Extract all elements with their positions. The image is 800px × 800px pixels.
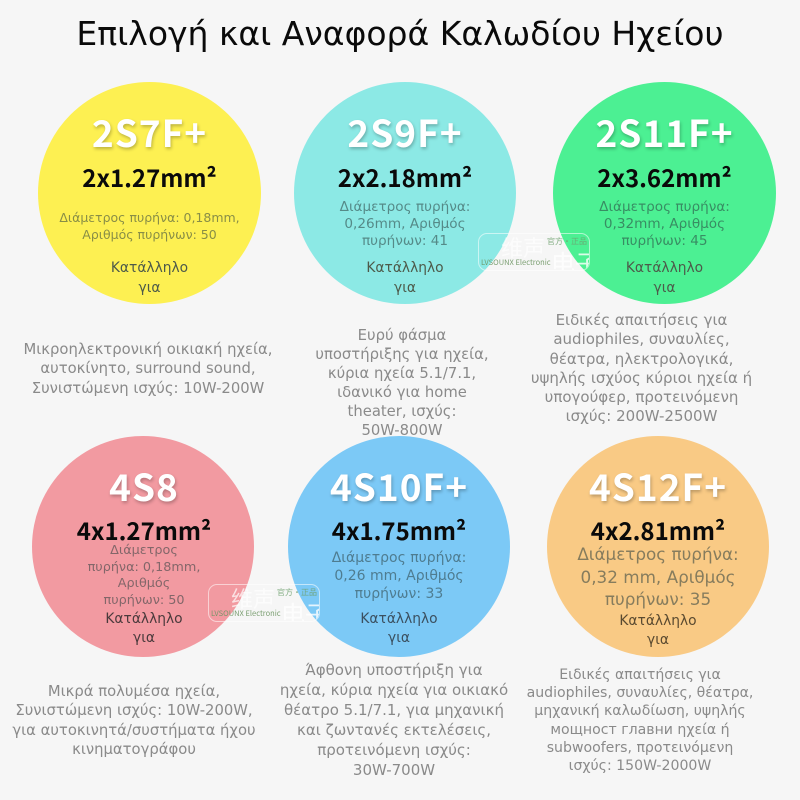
core details: 0,32mm, Αριθμός bbox=[604, 216, 725, 232]
description: 2S11F+: Ειδικές απαιτήσεις για bbox=[556, 311, 727, 329]
model name: 2S11F+ bbox=[595, 104, 734, 158]
watermark bbox=[208, 584, 320, 622]
panel: 2S9F+ bbox=[294, 82, 516, 304]
core details: πυρήνων: 33 bbox=[355, 586, 443, 602]
title: Επιλογή και Αναφορά Καλωδίου Ηχείου bbox=[76, 14, 724, 53]
core details bbox=[577, 544, 739, 609]
description: 4S12F+: Ειδικές απαιτήσεις για bbox=[559, 667, 721, 683]
description: 4S8 bbox=[12, 683, 256, 758]
description: 4S8: για αυτοκινητά/συστήματα ήχου bbox=[12, 722, 256, 739]
cable size: 2x2.18mm² bbox=[338, 159, 472, 194]
cable size: 2x1.27mm² bbox=[82, 159, 217, 194]
description: 4S12F+: ισχύς: 150W-2000W bbox=[569, 758, 711, 774]
suitable for bbox=[360, 611, 438, 646]
description: 4S12F+: мощност главни ηχεία ή bbox=[550, 722, 730, 738]
description: 2S7F+ bbox=[24, 341, 272, 397]
suitable for: Κατάλληλο bbox=[626, 260, 703, 276]
description: 2S11F+: υπογούφερ, προτεινόμενη bbox=[545, 388, 738, 406]
suitable for: για bbox=[139, 280, 160, 296]
core details: πυρήνα: 0,18mm, bbox=[88, 560, 200, 574]
description: 2S7F+: αυτοκίνητο, surround sound, bbox=[40, 360, 256, 377]
core details: Διάμετρος πυρήνα: 0,18mm, bbox=[59, 210, 240, 225]
cable size: 4x2.81mm² bbox=[591, 512, 725, 547]
panel: 2S11F+ bbox=[553, 82, 776, 304]
description: 4S10F+: Άφθονη υποστήριξη για bbox=[305, 661, 483, 679]
description: 4S10F+: προτεινόμενη ισχύς: bbox=[317, 741, 471, 759]
watermark: LVSOUNX Electronic bbox=[211, 608, 281, 619]
description: 2S9F+: theater, ισχύς: bbox=[348, 403, 456, 420]
description: 2S9F+: κύρια ηχεία 5.1/7.1, bbox=[328, 365, 476, 382]
core details: πυρήνων: 45 bbox=[621, 233, 708, 249]
cable size: 2x3.62mm² bbox=[597, 159, 732, 194]
core details bbox=[59, 210, 240, 242]
core details: Αριθμός bbox=[118, 576, 170, 591]
core details: Διάμετρος πυρήνα: bbox=[340, 199, 470, 215]
core details: Διάμετρος πυρήνα: bbox=[599, 199, 730, 215]
core details bbox=[332, 550, 466, 602]
watermark: LVSOUNX Electronic bbox=[481, 257, 551, 268]
core details: 0,32 mm, Αριθμός bbox=[581, 566, 735, 586]
suitable for bbox=[105, 611, 183, 646]
suitable for: για bbox=[388, 630, 410, 646]
description: 2S9F+: ιδανικό για home bbox=[337, 384, 467, 401]
suitable for: για bbox=[133, 630, 155, 646]
description: 4S12F+: subwoofers, προτεινόμενη bbox=[547, 740, 733, 756]
core details bbox=[599, 199, 730, 249]
description: 2S7F+: Συνιστώμενη ισχύς: 10W-200W bbox=[32, 380, 264, 397]
description: 2S9F+: 50W-800W bbox=[361, 422, 443, 439]
panel: 2S7F+ bbox=[38, 82, 261, 304]
description: 4S10F+: 30W-700W bbox=[353, 761, 435, 779]
model name: 2S7F+ bbox=[92, 104, 207, 158]
description: 4S10F+: θέατρο 5.1/7.1, για μηχανική bbox=[284, 701, 504, 719]
core details: πυρήνων: 41 bbox=[362, 233, 448, 249]
core details: 0,26 mm, Αριθμός bbox=[334, 568, 464, 584]
suitable for: για bbox=[394, 280, 416, 296]
description: 2S11F+: audiophiles, συναυλίες, bbox=[553, 330, 730, 348]
model name: 4S10F+ bbox=[330, 458, 468, 512]
suitable for: για bbox=[647, 632, 669, 648]
core details: Διάμετρος πυρήνα: bbox=[577, 544, 739, 564]
suitable for bbox=[366, 260, 444, 296]
model name: 4S8 bbox=[109, 458, 179, 512]
description: 2S11F+: υψηλής ισχύος κύριοι ηχεία ή bbox=[531, 369, 752, 387]
description: 4S10F+: ηχεία, κύρια ηχεία για οικιακό bbox=[280, 681, 508, 699]
suitable for: Κατάλληλο bbox=[366, 260, 444, 276]
core details: Διάμετρος bbox=[110, 543, 178, 558]
description: 4S12F+ bbox=[527, 667, 753, 774]
description: 4S8: Συνιστώμενη ισχύς: 10W-200W, bbox=[15, 702, 253, 719]
description: 2S9F+ bbox=[315, 327, 489, 439]
description: 4S12F+: audiophiles, συναυλίες, θέατρα, bbox=[527, 685, 753, 701]
description: 2S11F+: θέατρα, ηλεκτρολογικά, bbox=[550, 350, 733, 368]
suitable for: Κατάλληλο bbox=[619, 613, 697, 629]
core details: Διάμετρος πυρήνα: bbox=[332, 550, 466, 566]
description: 4S12F+: μηχανική καλωδίωση, υψηλής bbox=[534, 703, 746, 719]
description: 2S9F+: Ευρύ φάσμα bbox=[358, 327, 446, 344]
suitable for: Κατάλληλο bbox=[111, 260, 188, 276]
panel: 4S10F+ bbox=[288, 436, 510, 657]
core details bbox=[340, 199, 470, 249]
watermark: 官方·正品 bbox=[277, 587, 317, 598]
description: 2S7F+: Μικροηλεκτρονική οικιακή ηχεία, bbox=[24, 341, 272, 358]
suitable for bbox=[619, 613, 697, 648]
description: 2S11F+ bbox=[531, 311, 752, 425]
cable size: 4x1.27mm² bbox=[77, 512, 211, 547]
panel: 4S12F+ bbox=[547, 436, 769, 657]
suitable for: Κατάλληλο bbox=[105, 611, 183, 627]
description: 2S9F+: υποστήριξης για ηχεία, bbox=[315, 346, 489, 363]
description: 4S8: κινηματογράφου bbox=[72, 741, 196, 758]
description: 4S10F+: και ζωντανές εκτελέσεις, bbox=[297, 721, 491, 739]
description: 4S10F+ bbox=[280, 661, 508, 779]
suitable for: για bbox=[654, 280, 675, 296]
cable size: 4x1.75mm² bbox=[332, 512, 466, 547]
suitable for bbox=[111, 260, 188, 296]
description: 4S8: Μικρά πολυμέσα ηχεία, bbox=[48, 683, 220, 700]
suitable for: Κατάλληλο bbox=[360, 611, 438, 627]
model name: 2S9F+ bbox=[347, 104, 463, 158]
core details: 0,26mm, Αριθμός bbox=[344, 216, 466, 232]
model name: 4S12F+ bbox=[589, 458, 727, 512]
core details: πυρήνων: 50 bbox=[103, 592, 185, 608]
core details: πυρήνων: 35 bbox=[605, 589, 711, 609]
core details: Αριθμός πυρήνων: 50 bbox=[82, 227, 217, 242]
panel: 4S8 bbox=[32, 436, 254, 657]
description: 2S11F+: ισχύς: 200W-2500W bbox=[566, 407, 717, 425]
suitable for bbox=[626, 260, 703, 296]
watermark bbox=[478, 233, 590, 271]
core details bbox=[88, 543, 200, 608]
watermark: 官方·正品 bbox=[547, 236, 587, 247]
